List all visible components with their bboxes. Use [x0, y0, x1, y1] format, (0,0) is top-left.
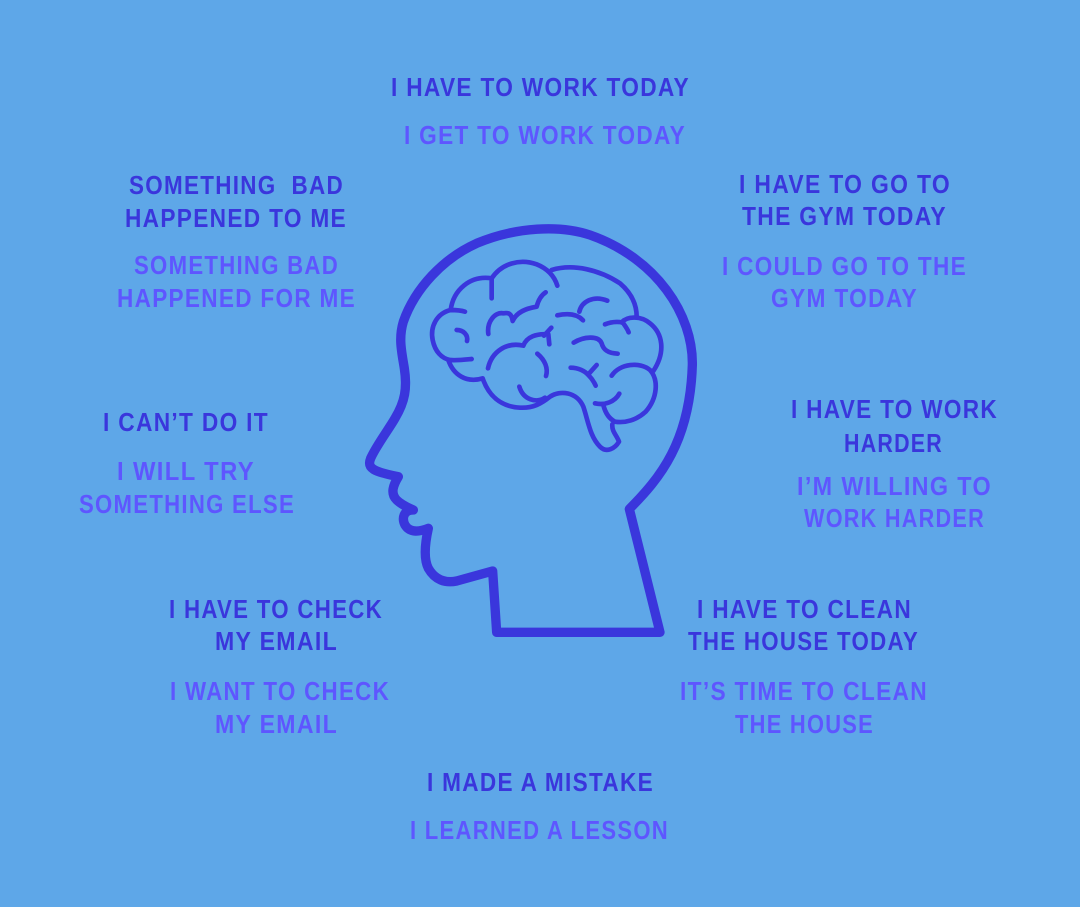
statement: can't do it: [79, 407, 295, 519]
statement: work today: I GET TO WORK TODAY: [404, 120, 686, 150]
statement: work harder: HARDER: [844, 428, 943, 458]
statement: can't do it: I WILL TRY: [117, 456, 255, 486]
statement: mistake: [410, 767, 669, 845]
brain: [432, 262, 661, 450]
statement: mistake: I LEARNED A LESSON: [410, 815, 669, 845]
statement: work harder: [791, 394, 998, 533]
statement: email: MY EMAIL: [215, 709, 338, 739]
statement: work harder: WORK HARDER: [804, 503, 985, 533]
statement: work harder: I’M WILLING TO: [797, 471, 992, 501]
statement: gym: GYM TODAY: [771, 283, 918, 313]
statement: can't do it: SOMETHING ELSE: [79, 489, 295, 519]
statement: something bad: HAPPENED FOR ME: [117, 283, 356, 313]
statement: work harder: I HAVE TO WORK: [791, 394, 998, 424]
statement: clean the house: [680, 594, 928, 739]
statement: email: MY EMAIL: [215, 626, 338, 656]
statement: mistake: I MADE A MISTAKE: [427, 767, 654, 797]
statement: something bad: SOMETHING BAD: [134, 250, 339, 280]
statement: something bad: HAPPENED TO ME: [125, 203, 347, 233]
head outline: [370, 229, 692, 632]
statement: gym: THE GYM TODAY: [742, 201, 947, 231]
statement: can't do it: I CAN’T DO IT: [103, 407, 269, 437]
statement: work today: [391, 72, 690, 150]
statement: email: I HAVE TO CHECK: [169, 594, 383, 624]
statement: clean the house: I HAVE TO CLEAN: [697, 594, 912, 624]
statement: clean the house: IT’S TIME TO CLEAN: [680, 676, 928, 706]
statement: work today: I HAVE TO WORK TODAY: [391, 72, 690, 102]
statement: gym: I COULD GO TO THE: [722, 251, 967, 281]
statement: email: [169, 594, 390, 739]
statement: clean the house: THE HOUSE TODAY: [688, 626, 919, 656]
icon: head with brain: [370, 229, 692, 632]
statement: email: I WANT TO CHECK: [170, 676, 390, 706]
statement: gym: I HAVE TO GO TO: [739, 169, 951, 199]
statement: something bad: SOMETHING BAD: [129, 170, 344, 200]
statement: clean the house: THE HOUSE: [735, 709, 874, 739]
statement: something bad: [117, 170, 356, 313]
statement: gym: [722, 169, 967, 313]
